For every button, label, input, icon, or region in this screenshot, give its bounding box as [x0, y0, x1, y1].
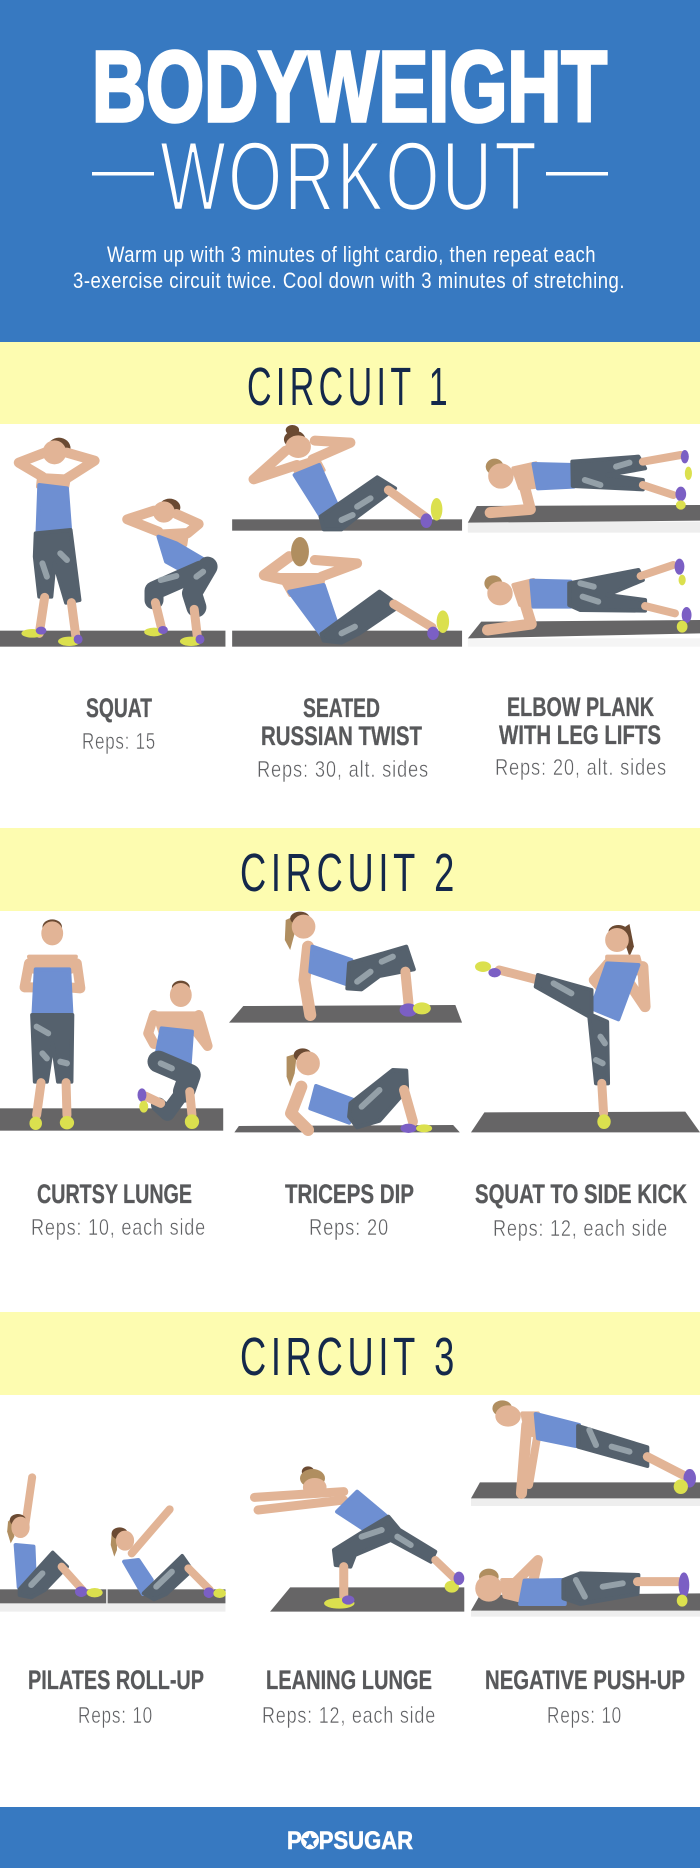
label: squat: SQUAT [86, 693, 152, 723]
label: squat to side kick [475, 1179, 687, 1241]
photos: circuit 1 [0, 425, 700, 647]
photo: negative push-up, bottom [471, 1560, 700, 1617]
label: squat: Reps: 15 [82, 728, 156, 754]
footer with logo [0, 1807, 700, 1868]
label: seated russian twist: Reps: 30, alt. sides [257, 756, 429, 782]
photo: elbow plank, low [468, 450, 700, 533]
photo: curtsy lunge [0, 919, 223, 1131]
label: seated russian twist: SEATED [303, 693, 380, 723]
label: leaning lunge: Reps: 12, each side [262, 1702, 436, 1728]
photo: leaning lunge [254, 1466, 464, 1612]
label: negative push-up: Reps: 10 [547, 1702, 622, 1728]
photos: circuit 3 [0, 1400, 700, 1617]
panel: circuit 3 [0, 1312, 700, 1728]
label: triceps dip: Reps: 20 [309, 1214, 389, 1240]
photo: elbow plank, leg lift [468, 559, 700, 647]
label: curtsy lunge: Reps: 10, each side [31, 1214, 206, 1240]
label: pilates roll-up: Reps: 10 [78, 1702, 153, 1728]
label: leaning lunge: LEANING LUNGE [266, 1665, 432, 1695]
intro text: Warm up with 3 minutes of light cardio, then repeat each [107, 242, 596, 267]
label: triceps dip: TRICEPS DIP [285, 1179, 414, 1209]
photo: squat [0, 438, 225, 647]
heading: circuit 1 [0, 342, 700, 424]
panel: circuit 2 [0, 828, 700, 1241]
intro text [73, 242, 625, 293]
heading: circuit 3 [0, 1312, 700, 1395]
label: triceps dip [285, 1179, 414, 1240]
logo: popsugar: POPSUGAR [287, 1827, 413, 1855]
panel: circuit 1 [0, 342, 700, 782]
photo: triceps dip, up [229, 912, 462, 1023]
photo: triceps dip, down [234, 1048, 460, 1133]
label: pilates roll-up [28, 1665, 204, 1728]
photo: squat to side kick [471, 924, 700, 1132]
label: squat [82, 693, 156, 754]
photo: negative push-up, top [471, 1400, 700, 1506]
label: pilates roll-up: PILATES ROLL-UP [28, 1665, 204, 1695]
heading: circuit 2: CIRCUIT 2 [240, 843, 459, 903]
heading: circuit 2 [0, 828, 700, 911]
label: seated russian twist: RUSSIAN TWIST [261, 721, 422, 751]
heading: circuit 3: CIRCUIT 3 [240, 1327, 459, 1387]
photos: circuit 2 [0, 912, 700, 1133]
label: curtsy lunge [31, 1179, 206, 1240]
heading: circuit 1: CIRCUIT 1 [247, 357, 452, 417]
photo: seated russian twist, up [232, 425, 462, 531]
label: elbow plank with leg lifts [495, 692, 667, 780]
header panel [0, 0, 700, 342]
photo: pilates roll-up [0, 1477, 226, 1612]
photo: seated russian twist, twist [232, 537, 462, 647]
label: negative push-up [485, 1665, 685, 1728]
label: seated russian twist [257, 693, 429, 782]
label: curtsy lunge: CURTSY LUNGE [37, 1179, 192, 1209]
label: leaning lunge [262, 1665, 436, 1728]
title: workout with side rules: WORKOUT [160, 121, 539, 231]
